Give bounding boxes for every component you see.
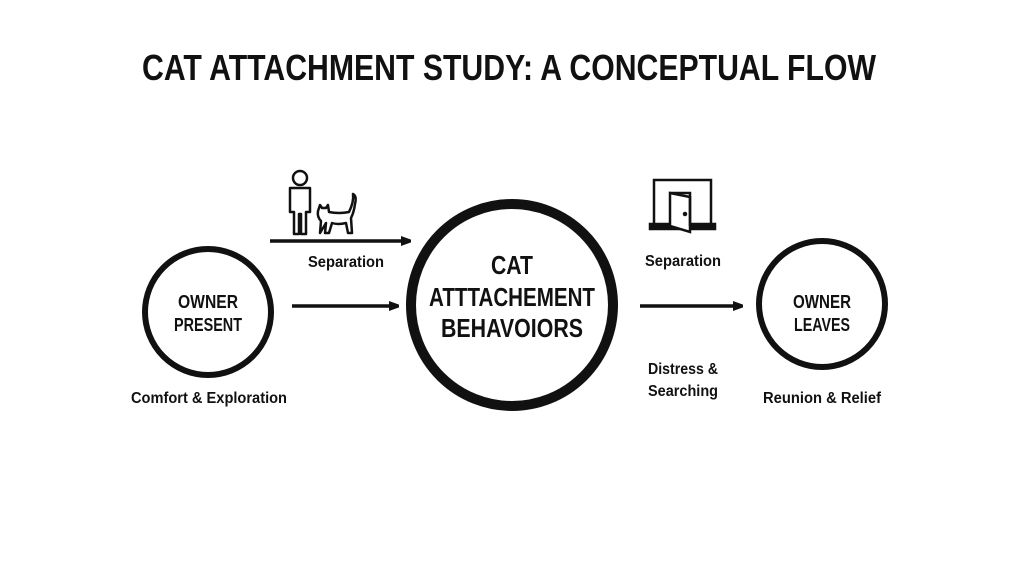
text: distress & searching: Searching: [648, 383, 718, 400]
circle: owner present: PRESENT: [174, 315, 242, 335]
circle: cat attachment behaviors: [411, 204, 613, 406]
text: distress & searching: Distress &: [648, 361, 718, 378]
label: separation right: Separation: [645, 253, 721, 270]
arrow: to owner leaves: [640, 304, 742, 308]
text: reunion & relief: Reunion & Relief: [763, 390, 882, 407]
text: comfort & exploration: Comfort & Exploration: [131, 390, 287, 407]
arrow: top separation: [270, 239, 410, 243]
label: separation left: Separation: [308, 254, 384, 271]
circle: owner present: [145, 249, 271, 375]
text: distress & searching: [648, 361, 718, 400]
circle: owner leaves: OWNER: [793, 292, 851, 312]
icon: person and cat: [290, 171, 356, 234]
circle: owner leaves: LEAVES: [794, 315, 850, 335]
circle: cat attachment behaviors: CAT: [491, 250, 533, 280]
icon: door: [650, 180, 715, 232]
circle: owner present: OWNER: [178, 292, 238, 312]
circle: owner leaves: [759, 241, 885, 367]
circle: cat attachment behaviors: BEHAVOIORS: [441, 313, 583, 343]
arrow: to center: [292, 304, 398, 308]
circle: cat attachment behaviors: ATTTACHEMENT: [429, 282, 595, 312]
title: CAT ATTACHMENT STUDY: A CONCEPTUAL FLOW: [142, 47, 876, 88]
